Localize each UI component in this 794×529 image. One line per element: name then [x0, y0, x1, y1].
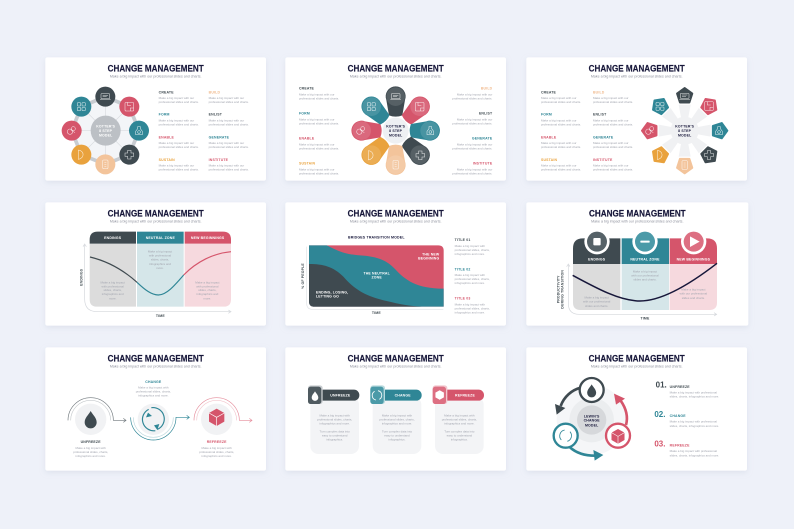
- step labels: FORM: [159, 113, 170, 117]
- axis label x: TIME: [156, 314, 165, 318]
- card: change: easy to understand: [384, 434, 410, 438]
- card: refreeze: easy to understand: [447, 434, 472, 438]
- step labels: Make a big impact with our: [209, 118, 244, 122]
- panel: endings curve chart: [45, 202, 266, 326]
- card: refreeze: Make a big impact with: [444, 413, 475, 417]
- subheading: Make a big impact with our professional slides and charts.: [591, 365, 683, 369]
- step labels: BUILD: [593, 90, 605, 94]
- step labels: SUSTAIN: [299, 161, 316, 165]
- step labels: professional slides and charts.: [159, 145, 199, 149]
- card: change: [370, 385, 422, 454]
- column backgrounds and headers: NEUTRAL ZONE: [630, 258, 660, 262]
- step labels: Make a big impact with our: [209, 141, 244, 145]
- column notes: with professional: [196, 284, 219, 288]
- column notes: slides, charts,: [151, 258, 169, 262]
- column notes: with professional: [102, 284, 124, 288]
- titles list: [455, 238, 490, 314]
- icon: stop: [584, 229, 610, 254]
- pentagon diagram: MODEL: [678, 133, 692, 137]
- titles list: professional slides, charts,: [455, 306, 490, 310]
- item 03: slides, charts, infographics and more.: [670, 453, 719, 457]
- step labels: ENABLE: [541, 135, 557, 139]
- item 01: Make a big impact with professional: [670, 390, 717, 394]
- step labels: INSTITUTE: [593, 158, 613, 162]
- axis label y: ENDINGS: [80, 268, 84, 286]
- card: unfreeze: professional slides, charts,: [317, 417, 352, 421]
- step labels: Make a big impact with our: [209, 96, 244, 100]
- card: change: CHANGE: [395, 393, 411, 397]
- step labels: professional slides and charts.: [299, 147, 339, 151]
- heading: CHANGE MANAGEMENT: [108, 209, 204, 219]
- step: refreeze: REFREEZE: [207, 440, 227, 444]
- subheading: Make a big impact with our professional slides and charts.: [350, 75, 442, 79]
- step: change: Make a big impact with: [138, 386, 169, 390]
- step: change: professional slides, charts,: [136, 390, 171, 394]
- wheel diagram: [62, 87, 149, 174]
- column notes: [101, 250, 220, 300]
- step labels: ENABLE: [159, 135, 175, 139]
- panel: productivity curve chart: [526, 202, 748, 326]
- area chart: THE NEUTRAL: [363, 272, 391, 276]
- titles list: Make a big impact with: [455, 273, 485, 277]
- wheel diagram: 8 STEP: [99, 129, 113, 133]
- subheading: Make a big impact with our professional slides and charts.: [350, 365, 442, 369]
- card: change: Turn complex data into: [382, 430, 412, 434]
- petal diagram: KOTTER'S: [386, 125, 406, 129]
- step labels: professional slides and charts.: [541, 122, 581, 126]
- step: unfreeze: [68, 398, 126, 458]
- step labels: Make a big impact with our: [299, 117, 335, 121]
- axes: [307, 247, 443, 309]
- column notes: slides, charts,: [198, 288, 217, 292]
- step labels: professional slides and charts.: [452, 171, 492, 175]
- panel: Bridges transition model: [285, 202, 506, 326]
- step labels: Make a big impact with our: [299, 142, 335, 146]
- item 01: [656, 381, 719, 399]
- step labels: professional slides and charts.: [159, 100, 199, 104]
- column backgrounds and headers: ENDINGS: [588, 258, 606, 262]
- step: refreeze: professional slides, charts,: [199, 450, 234, 454]
- item 01: 01.: [656, 381, 667, 390]
- step labels: professional slides and charts.: [452, 147, 492, 151]
- item 03: REFREEZE: [670, 443, 690, 447]
- step labels: professional slides and charts.: [452, 122, 492, 126]
- step labels: professional slides and charts.: [593, 100, 633, 104]
- cycle diagram: CHANGE: [584, 419, 600, 423]
- step: unfreeze: UNFREEZE: [81, 440, 101, 444]
- titles list: Make a big impact with: [455, 302, 485, 306]
- column notes: with our professional: [631, 273, 659, 277]
- step labels: Make a big impact with our: [593, 96, 629, 100]
- item 02: CHANGE: [670, 414, 686, 418]
- step labels: Make a big impact with our: [159, 96, 194, 100]
- step: refreeze: [194, 398, 252, 458]
- step labels: professional slides and charts.: [209, 122, 249, 126]
- heading: CHANGE MANAGEMENT: [108, 354, 204, 364]
- step: refreeze: Make a big impact with: [201, 446, 232, 450]
- column notes: Make a big impact: [585, 296, 609, 300]
- step labels: Make a big impact with our: [159, 164, 194, 168]
- step labels: ENABLE: [299, 136, 315, 140]
- heading: CHANGE MANAGEMENT: [348, 64, 444, 74]
- step labels: INSTITUTE: [473, 161, 493, 165]
- axis label y: % OF PEOPLE: [301, 263, 305, 289]
- step labels: BUILD: [481, 87, 493, 91]
- column notes: infographics and: [102, 292, 124, 296]
- area chart: ZONE: [371, 276, 382, 280]
- titles list: infographics and more.: [455, 252, 485, 256]
- card: refreeze: infographics and more.: [444, 421, 475, 425]
- column notes: with our professional: [583, 300, 611, 304]
- item 01: UNFREEZE: [670, 385, 690, 389]
- step labels: Make a big impact with our: [593, 141, 629, 145]
- titles list: professional slides, charts,: [455, 248, 490, 252]
- titles list: professional slides, charts,: [455, 277, 490, 281]
- icon: pause dash: [632, 229, 658, 254]
- titles list: TITLE 03: [455, 296, 471, 300]
- step labels: professional slides and charts.: [593, 145, 633, 149]
- card: refreeze: infographics.: [451, 438, 468, 442]
- cycle diagram: MODEL: [585, 423, 599, 427]
- pentagon diagram: [642, 88, 727, 173]
- column notes: Make a big impact: [195, 280, 220, 284]
- step labels: GENERATE: [593, 135, 614, 139]
- step: refreeze: infographics and more.: [201, 454, 232, 458]
- card: refreeze: [433, 385, 484, 454]
- pentagon diagram: 8 STEP: [678, 129, 692, 133]
- step labels: CREATE: [299, 87, 315, 91]
- step: unfreeze: infographics and more.: [75, 454, 106, 458]
- step labels: ENLIST: [593, 113, 607, 117]
- panel: Lewin process arrows: [45, 347, 266, 471]
- column notes: Make a big impact: [633, 269, 657, 273]
- step labels: Make a big impact with our: [457, 92, 492, 96]
- titles list: Make a big impact with: [455, 244, 485, 248]
- panel: Lewin cards: [285, 347, 506, 471]
- card: unfreeze: UNFREEZE: [330, 393, 351, 397]
- step labels: BUILD: [209, 90, 220, 94]
- step labels: [159, 90, 249, 172]
- step labels: Make a big impact with our: [209, 164, 244, 168]
- step labels: Make a big impact with our: [159, 118, 194, 122]
- heading: CHANGE MANAGEMENT: [348, 209, 444, 219]
- item 01: slides, charts, infographics and more.: [670, 395, 719, 399]
- item 03: 03.: [654, 439, 665, 448]
- item 03: Make a big impact with professional: [670, 449, 717, 453]
- column notes: with our professional: [680, 292, 707, 296]
- card: change: professional slides, charts,: [379, 417, 415, 421]
- column notes: slides and charts.: [585, 304, 608, 308]
- item 03: [654, 439, 719, 457]
- heading: CHANGE MANAGEMENT: [348, 354, 444, 364]
- column notes: with professional: [149, 254, 171, 258]
- subheading: Make a big impact with our professional slides and charts.: [110, 75, 202, 79]
- item 02: slides, charts, infographics and more.: [670, 424, 719, 428]
- step labels: professional slides and charts.: [541, 100, 581, 104]
- axis label x: TIME: [640, 317, 650, 321]
- panel: Kotter 8 step pentagons: [526, 57, 747, 181]
- column backgrounds and headers: NEW BEGINNINGS: [677, 258, 711, 262]
- titles list: TITLE 01: [455, 238, 471, 242]
- step labels: SUSTAIN: [541, 158, 558, 162]
- axis label y: [556, 270, 565, 309]
- cycle diagram: LEWIN'S: [584, 414, 600, 418]
- step labels: professional slides and charts.: [299, 171, 339, 175]
- axis label y: DURING TRANSITION: [561, 270, 565, 309]
- step labels: Make a big impact with our: [457, 117, 492, 121]
- step labels: professional slides and charts.: [299, 97, 339, 101]
- column notes: more.: [204, 296, 211, 300]
- item 02: Make a big impact with professional: [670, 420, 717, 424]
- heading: CHANGE MANAGEMENT: [108, 64, 204, 74]
- step labels: Make a big impact with our: [541, 96, 577, 100]
- chart title: BRIDGES TRANSITION MODEL: [348, 235, 405, 239]
- item 02: [654, 410, 719, 428]
- step labels: INSTITUTE: [209, 158, 229, 162]
- card: unfreeze: infographics.: [326, 438, 343, 442]
- step labels: professional slides and charts.: [159, 168, 199, 172]
- card: unfreeze: easy to understand: [322, 434, 348, 438]
- column notes: slides and charts.: [633, 278, 657, 282]
- axis label y: PRODUCTIVITY: [556, 275, 560, 303]
- step labels: Make a big impact with our: [457, 142, 492, 146]
- column backgrounds and headers: NEW BEGINNINGS: [191, 236, 225, 240]
- cycle diagram: [554, 378, 630, 461]
- column notes: Make a big impact: [101, 280, 125, 284]
- step labels: professional slides and charts.: [209, 100, 249, 104]
- area chart: [309, 245, 444, 307]
- card: unfreeze: infographics and more.: [319, 421, 350, 425]
- step: change: infographics and more.: [138, 394, 169, 398]
- step labels: professional slides and charts.: [593, 122, 633, 126]
- card: change: infographics.: [389, 438, 406, 442]
- column notes: infographics and: [196, 292, 219, 296]
- subheading: Make a big impact with our professional slides and charts.: [110, 365, 202, 369]
- column backgrounds and headers: NEUTRAL ZONE: [146, 236, 175, 240]
- step labels: Make a big impact with our: [299, 167, 335, 171]
- panel: Kotter 8 step petals: [285, 57, 506, 181]
- card: unfreeze: Make a big impact with: [319, 413, 350, 417]
- subheading: Make a big impact with our professional slides and charts.: [591, 75, 683, 79]
- step labels: professional slides and charts.: [541, 168, 581, 172]
- column notes: infographics and: [149, 262, 171, 266]
- column notes: slides, charts,: [104, 288, 122, 292]
- transition curve: [90, 252, 231, 295]
- card: change: infographics and more.: [382, 421, 412, 425]
- axes: [83, 244, 231, 313]
- panel: Kotter 8 step circle wheel: [45, 57, 266, 181]
- step labels: professional slides and charts.: [593, 168, 633, 172]
- area chart: THE NEW: [422, 252, 440, 256]
- card: change: Make a big impact with: [382, 413, 413, 417]
- column notes: slides and charts.: [682, 296, 705, 300]
- step labels: FORM: [299, 111, 310, 115]
- petal diagram: MODEL: [389, 134, 403, 138]
- card: unfreeze: Turn complex data into: [320, 430, 350, 434]
- step labels: ENLIST: [479, 111, 493, 115]
- column notes: [583, 269, 707, 308]
- panel: Lewin change model cycle: [526, 347, 747, 471]
- step labels: [541, 90, 633, 172]
- titles list: infographics and more.: [455, 310, 485, 314]
- step labels: Make a big impact with our: [541, 118, 577, 122]
- step labels: Make a big impact with our: [159, 141, 194, 145]
- step labels: ENLIST: [209, 113, 223, 117]
- step labels: professional slides and charts.: [299, 122, 339, 126]
- step labels: GENERATE: [209, 135, 230, 139]
- step labels: GENERATE: [472, 136, 493, 140]
- step labels: Make a big impact with our: [541, 164, 577, 168]
- column notes: more.: [156, 266, 164, 270]
- subheading: Make a big impact with our professional slides and charts.: [350, 220, 442, 224]
- step: unfreeze: professional slides, charts,: [73, 450, 108, 454]
- column backgrounds and headers: [90, 232, 231, 307]
- icon: play: [681, 229, 706, 254]
- column notes: Make a big impact: [148, 250, 172, 254]
- heading: CHANGE MANAGEMENT: [589, 354, 685, 364]
- step: change: [131, 380, 189, 440]
- column notes: Make a big impact: [681, 288, 706, 292]
- area chart: LETTING GO: [316, 295, 339, 299]
- column notes: more.: [109, 296, 117, 300]
- subheading: Make a big impact with our professional slides and charts.: [110, 219, 202, 223]
- area chart: ENDING, LOSING,: [316, 290, 348, 294]
- productivity curve: [573, 263, 717, 301]
- step labels: SUSTAIN: [159, 158, 175, 162]
- step labels: FORM: [541, 113, 552, 117]
- wheel diagram: MODEL: [99, 133, 113, 137]
- step labels: Make a big impact with our: [593, 118, 629, 122]
- titles list: TITLE 02: [455, 267, 471, 271]
- axis label x: TIME: [372, 311, 381, 315]
- area chart: BEGINNING: [418, 257, 439, 261]
- card: unfreeze: [308, 385, 359, 454]
- column backgrounds and headers: [573, 238, 717, 310]
- pentagon diagram: KOTTER'S: [675, 125, 695, 129]
- petal diagram: 8 STEP: [389, 129, 403, 133]
- step labels: Make a big impact with our: [541, 141, 577, 145]
- titles list: infographics and more.: [455, 281, 485, 285]
- step labels: professional slides and charts.: [209, 168, 249, 172]
- card: refreeze: REFREEZE: [455, 393, 475, 397]
- subheading: Make a big impact with our professional slides and charts.: [591, 220, 684, 224]
- step labels: professional slides and charts.: [541, 145, 581, 149]
- card: refreeze: Turn complex data into: [444, 430, 475, 434]
- heading: CHANGE MANAGEMENT: [589, 209, 686, 219]
- petal diagram: [351, 86, 440, 175]
- step labels: professional slides and charts.: [209, 145, 249, 149]
- step labels: CREATE: [159, 90, 174, 94]
- heading: CHANGE MANAGEMENT: [589, 64, 685, 74]
- axes: [567, 264, 717, 316]
- step labels: Make a big impact with our: [457, 167, 492, 171]
- step: unfreeze: Make a big impact with: [75, 446, 106, 450]
- step: change: CHANGE: [145, 380, 162, 384]
- step labels: CREATE: [541, 90, 557, 94]
- step labels: Make a big impact with our: [593, 164, 629, 168]
- column backgrounds and headers: ENDINGS: [104, 236, 122, 240]
- step labels: Make a big impact with our: [299, 92, 335, 96]
- step labels: professional slides and charts.: [452, 97, 492, 101]
- step labels: professional slides and charts.: [159, 122, 199, 126]
- item 02: 02.: [654, 410, 665, 419]
- step labels: [299, 87, 493, 175]
- card: refreeze: professional slides, charts,: [442, 417, 477, 421]
- wheel diagram: KOTTER'S: [96, 125, 116, 129]
